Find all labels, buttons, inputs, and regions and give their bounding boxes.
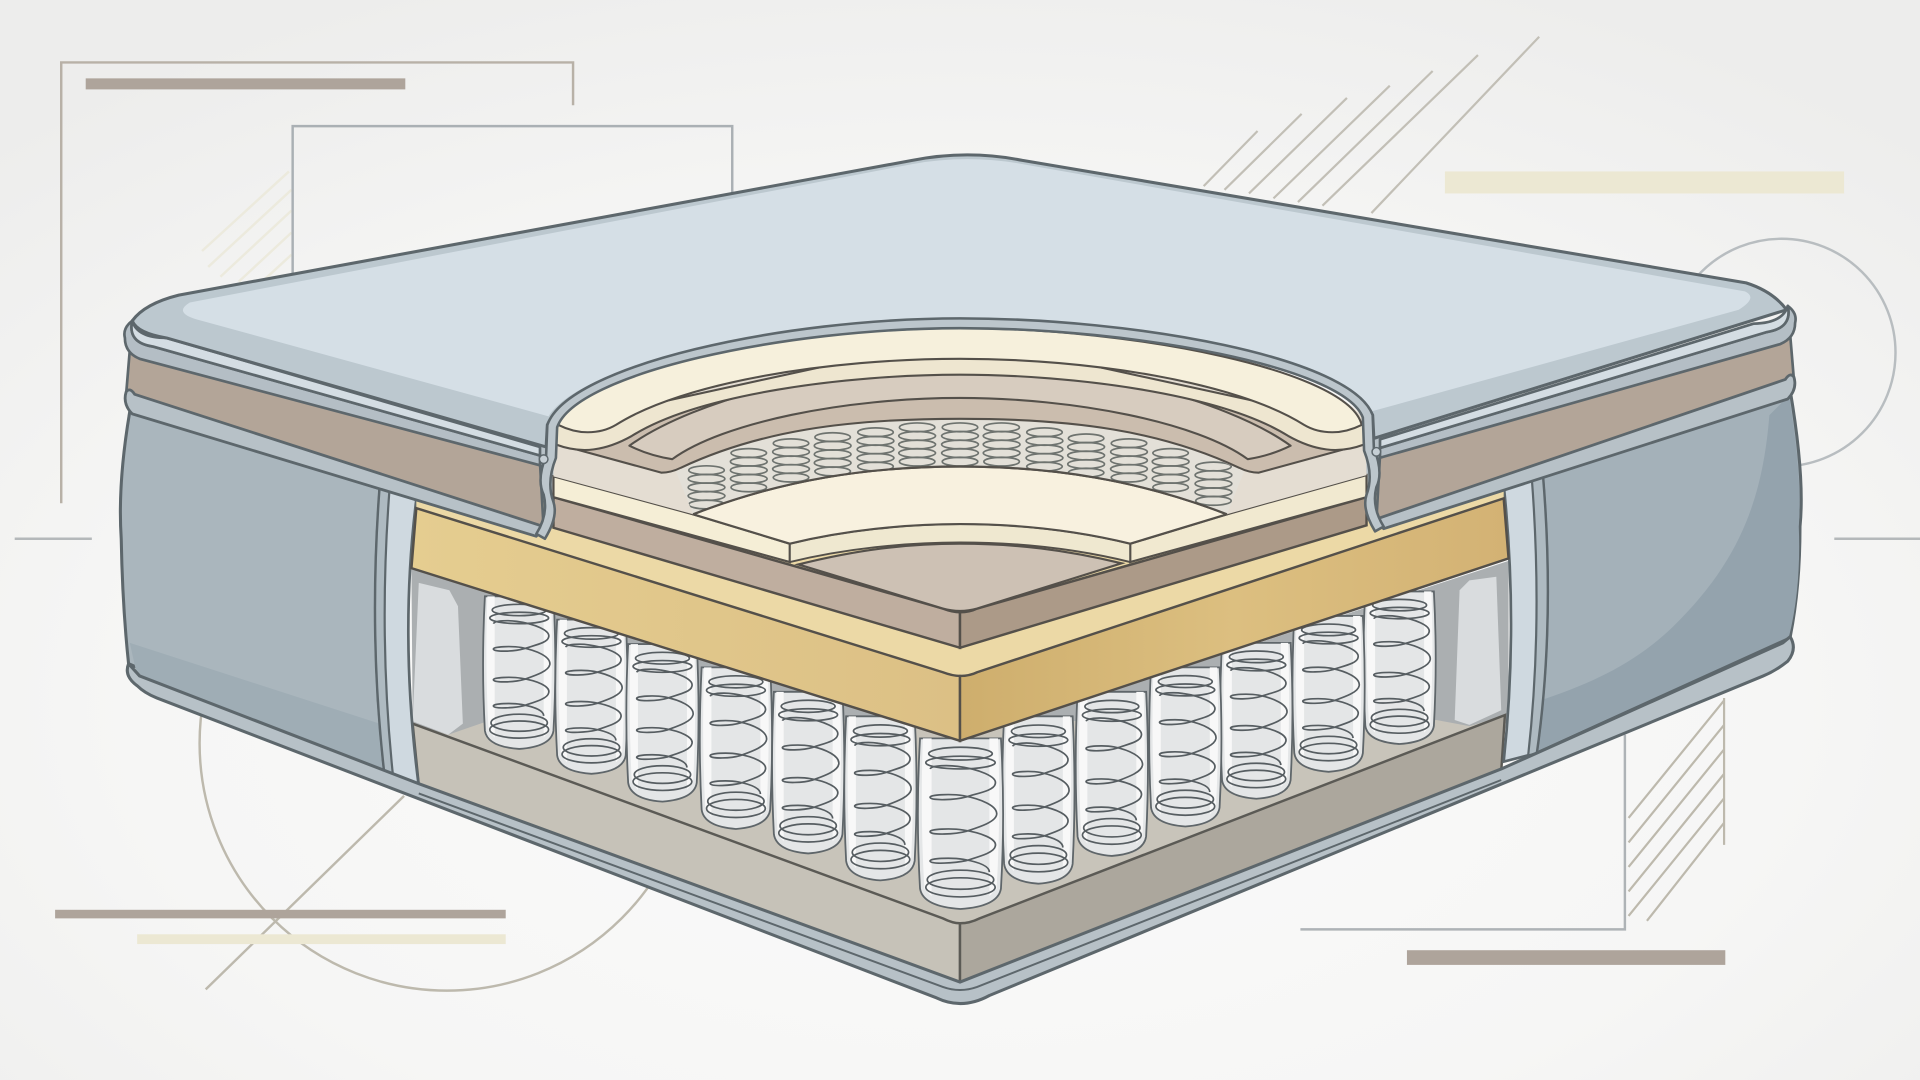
cream curved top: [693, 467, 1227, 544]
right seam node: [1372, 448, 1381, 456]
diagonal: [206, 796, 404, 989]
inner coil springs: [688, 423, 1232, 509]
pocket springs: [483, 591, 1436, 909]
frame top left: [61, 62, 573, 503]
top surface band: [132, 155, 1787, 447]
right side panel: [1504, 391, 1801, 762]
floor: [413, 715, 1507, 922]
arch metal strip with seams: [536, 318, 1384, 539]
hatch pale left: [202, 171, 291, 284]
base left front: [413, 724, 960, 983]
left seam strip: [375, 489, 419, 786]
taupe right face: [960, 497, 1367, 648]
bar lower left: [55, 910, 506, 918]
cream layer right band: [1130, 475, 1367, 562]
cavity back: [411, 561, 1509, 923]
circle right: [1668, 239, 1896, 467]
bar lower left pale: [137, 934, 506, 944]
yellow foam front right: [960, 498, 1509, 741]
left seam node: [539, 455, 548, 463]
left upper side layers: [124, 321, 544, 536]
taupe arc light: [629, 362, 1291, 459]
hatch bottom right: [1629, 698, 1724, 921]
left side panel: [120, 411, 419, 786]
right panel shading: [1538, 396, 1800, 751]
side block left: [413, 583, 463, 735]
bar top left: [86, 78, 405, 89]
taupe left face: [553, 497, 960, 648]
mattress: [120, 155, 1801, 1004]
bottom piping: [127, 637, 1793, 1004]
cream curved front: [790, 524, 1130, 562]
frame inner: [293, 126, 732, 276]
large circle: [200, 496, 694, 991]
right seam strip: [1504, 475, 1548, 762]
yellow foam front left: [411, 508, 960, 741]
bar bottom right: [1407, 950, 1725, 965]
taupe floor: [798, 544, 1122, 611]
cream layer left band: [553, 476, 790, 562]
second cream layer: [556, 337, 1364, 450]
side block right: [1455, 577, 1501, 725]
base right front: [960, 715, 1505, 983]
hatch top right: [1204, 37, 1539, 213]
cavity lower arc: [693, 467, 1227, 514]
top surface: [183, 159, 1750, 416]
filler behind seams: [527, 416, 1393, 612]
right upper side layers: [1376, 306, 1796, 529]
spring cavity: [676, 419, 1244, 514]
frame bottom right: [1300, 735, 1625, 929]
top cream layer: [558, 328, 1362, 432]
bar top right: [1445, 171, 1844, 193]
yellow top face: [416, 480, 1504, 675]
taupe arc dark: [558, 367, 1362, 473]
tick lines: [15, 538, 1920, 540]
arch base: [553, 328, 1367, 514]
